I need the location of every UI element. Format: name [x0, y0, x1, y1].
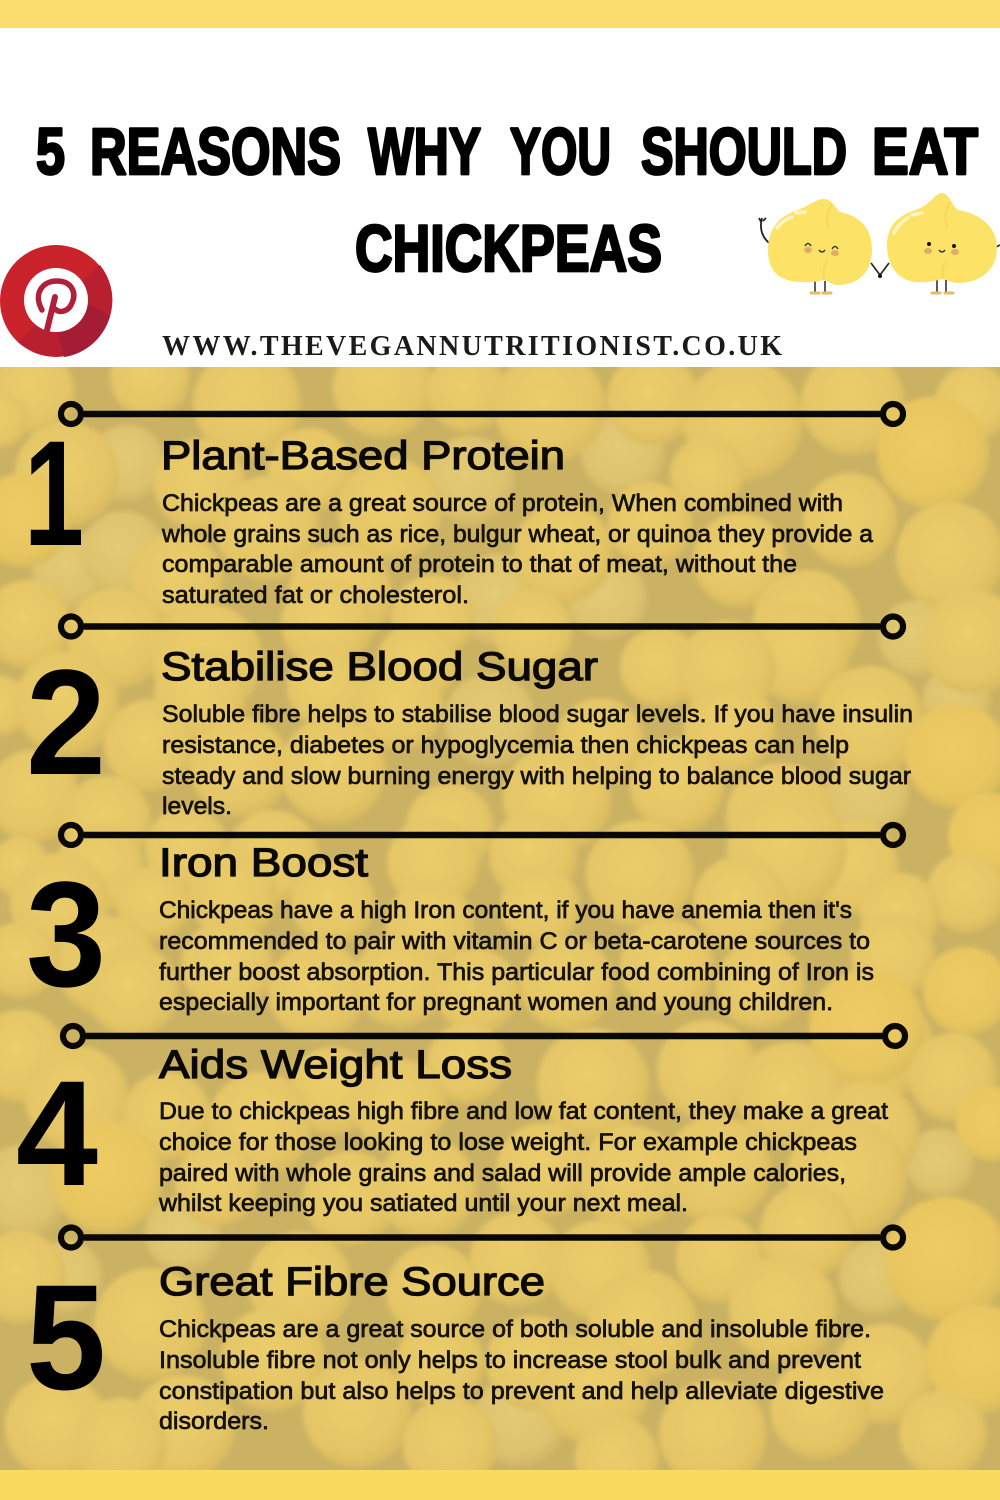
- reason 5: Insoluble fibre not only helps to increase stool bulk and prevent: [159, 1347, 861, 1374]
- reason 1: comparable amount of protein to that of meat, without the: [162, 551, 797, 578]
- website address: WWW.THEVEGANNUTRITIONIST.CO.UK: [162, 331, 782, 362]
- reason 4: Due to chickpeas high fibre and low fat content, they make a great: [159, 1098, 888, 1125]
- reason 2: Soluble fibre helps to stabilise blood sugar levels. If you have insulin: [162, 701, 913, 728]
- reason 1: [24, 409, 874, 609]
- reason 5: Great Fibre Source: [159, 1260, 545, 1304]
- divider 4: [63, 1026, 905, 1046]
- reason 4: Aids Weight Loss: [159, 1043, 512, 1087]
- icon: Pinterest logo: [0, 245, 112, 357]
- reason 1: Plant-Based Protein: [161, 434, 565, 478]
- chickpea photo background: [0, 338, 1000, 1500]
- reason 2: 2: [26, 638, 106, 806]
- divider 5: [61, 1228, 903, 1248]
- icon: smiling chickpea characters: [759, 193, 1000, 293]
- reason 5: 5: [26, 1253, 106, 1421]
- title: [36, 114, 978, 285]
- reason 4: whilst keeping you satiated until your next meal.: [158, 1190, 688, 1217]
- reason 2: [26, 638, 913, 820]
- reason 5: constipation but also helps to prevent and help alleviate digestive: [159, 1378, 884, 1405]
- divider 2: [61, 616, 903, 636]
- reason 3: [26, 841, 874, 1018]
- title: WHY: [368, 114, 481, 188]
- title: EAT: [872, 114, 978, 188]
- reason 3: 3: [26, 850, 106, 1018]
- reason 3: Iron Boost: [159, 841, 368, 885]
- reason 4: [16, 1043, 888, 1217]
- top yellow band: [0, 0, 1000, 28]
- reason 1: whole grains such as rice, bulgur wheat, or quinoa they provide a: [161, 521, 874, 548]
- reason 1: 1: [24, 409, 84, 577]
- bottom yellow band: [0, 1470, 1000, 1500]
- reason 5: Chickpeas are a great source of both soluble and insoluble fibre.: [159, 1316, 871, 1343]
- reason 5: disorders.: [159, 1408, 269, 1435]
- reason 1: saturated fat or cholesterol.: [162, 582, 469, 609]
- reason 3: Chickpeas have a high Iron content, if you have anemia then it's: [159, 897, 852, 924]
- reason 4: choice for those looking to lose weight. For example chickpeas: [159, 1129, 857, 1156]
- reason 2: resistance, diabetes or hypoglycemia then chickpeas can help: [162, 732, 849, 759]
- reason 5: [26, 1253, 884, 1435]
- title: REASONS: [90, 114, 341, 188]
- title: 5: [36, 114, 65, 188]
- divider 1: [61, 404, 903, 424]
- reason 3: especially important for pregnant women and young children.: [159, 989, 833, 1016]
- reason 4: paired with whole grains and salad will provide ample calories,: [159, 1160, 846, 1187]
- title: CHICKPEAS: [355, 211, 662, 285]
- reason 3: recommended to pair with vitamin C or beta-carotene sources to: [159, 928, 870, 955]
- reason 4: 4: [16, 1049, 98, 1217]
- reason 1: Chickpeas are a great source of protein, When combined with: [162, 490, 843, 517]
- reason 2: steady and slow burning energy with helping to balance blood sugar: [162, 763, 911, 790]
- title: SHOULD: [641, 114, 847, 188]
- reason 2: Stabilise Blood Sugar: [161, 645, 598, 689]
- reason 3: further boost absorption. This particular food combining of Iron is: [159, 959, 874, 986]
- reason 2: levels.: [162, 793, 232, 820]
- title: YOU: [510, 114, 611, 188]
- divider 3: [61, 825, 903, 845]
